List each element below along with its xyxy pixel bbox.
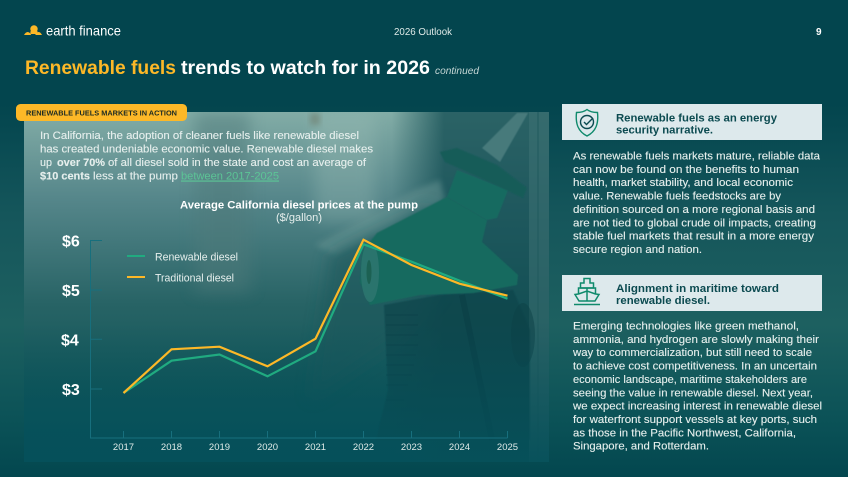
text block: energy security: health, market stability, and local economic	[573, 177, 793, 189]
text block: energy security: are not tied to global crude oil impacts, creating	[573, 217, 816, 229]
panel: energy security heading	[562, 104, 822, 140]
text block: maritime: economic landscape, maritime stakeholders are	[573, 374, 807, 386]
text block: energy security: value. Renewable fuels feedstocks are by	[573, 191, 781, 203]
y-axis labels: $4	[61, 332, 79, 350]
text block: maritime: Singapore, and Rotterdam.	[573, 441, 709, 453]
line: renewable diesel	[124, 244, 508, 393]
text block: maritime: Emerging technologies like green methanol,	[573, 320, 799, 332]
text block: California intro: up	[40, 157, 52, 169]
text block: energy security: can now be found on the benefits to human	[573, 164, 799, 176]
chart title: ($/gallon)	[276, 212, 322, 224]
panel: maritime heading	[562, 275, 822, 311]
y-axis labels: $3	[62, 382, 80, 399]
text block: maritime: we expect increasing interest in renewable diesel	[572, 401, 822, 413]
title: trends to watch for in 2026	[181, 57, 430, 79]
x-axis labels: 2023	[401, 442, 422, 453]
x-axis labels: 2021	[305, 442, 326, 453]
x-axis labels: 2018	[161, 442, 182, 453]
text block: maritime: seeing the value in renewable diesel. Next year,	[573, 387, 813, 399]
nozzle pipe	[482, 113, 528, 162]
y-axis labels: $5	[62, 283, 80, 300]
tag: renewable fuels markets in action: RENEWABLE FUELS MARKETS IN ACTION	[26, 110, 177, 118]
chart: average California diesel prices	[61, 200, 518, 453]
text block: California intro: of all diesel sold in the state and cost an average of	[108, 157, 367, 169]
text block: California intro: $10 cents	[40, 170, 90, 182]
x-axis labels: 2022	[353, 442, 374, 453]
x-axis labels: 2017	[113, 442, 134, 453]
text block: energy security	[573, 150, 821, 256]
title: Renewable fuels	[25, 57, 176, 79]
text block: maritime	[572, 320, 822, 453]
tag: renewable fuels markets in action	[16, 104, 187, 121]
text block: energy security: secure region and nation.	[573, 244, 702, 256]
x-axis labels	[113, 442, 518, 453]
legend: Traditional diesel	[155, 272, 234, 284]
text block: energy security: definition sourced on a more regional basis and	[573, 204, 815, 216]
text block: maritime: way to commercialization, but still need to scale	[572, 347, 812, 359]
nozzle body	[360, 197, 518, 305]
text block: energy security: As renewable fuels markets mature, reliable data	[573, 150, 821, 162]
nozzle handle grip lines	[386, 315, 418, 400]
header: 2026 Outlook: 2026 Outlook	[394, 27, 453, 38]
text block: maritime: to achieve cost competitiveness. In an uncertain	[573, 361, 817, 373]
text block: California intro: over 70%	[57, 157, 105, 169]
y-axis labels	[61, 234, 80, 399]
line: traditional diesel	[124, 240, 508, 393]
y-axis labels: $6	[62, 234, 80, 250]
x-axis labels: 2020	[257, 442, 278, 453]
text block: California intro: less at the pump	[93, 170, 178, 182]
nozzle handle	[384, 290, 530, 406]
page number: 9	[816, 27, 822, 38]
text block: California intro: In California, the adoption of cleaner fuels like renewable diesel	[40, 130, 359, 142]
chart axes	[90, 240, 508, 438]
panel: maritime heading: Alignment in maritime toward	[616, 283, 779, 295]
text block: California intro: between 2017-2025	[181, 170, 279, 182]
chart title: Average California diesel prices at the pump	[180, 200, 418, 212]
chart title	[180, 200, 418, 224]
legend: Renewable diesel	[155, 252, 238, 264]
text block: maritime: for waterfront support vessels at key ports, such	[573, 414, 817, 426]
nozzle stem	[447, 170, 508, 220]
text block: California intro: has created undeniable economic value. Renewable diesel makes	[40, 144, 373, 156]
legend	[127, 252, 238, 284]
panel: energy security heading: security narrative.	[616, 124, 713, 136]
x-axis labels: 2024	[449, 442, 470, 453]
logo: earth finance: earth finance	[46, 22, 121, 38]
nozzle collar	[440, 148, 527, 198]
text block: energy security: stable fuel markets that result in a more energy	[573, 231, 814, 243]
text block: maritime: as those in the Pacific Northwest, California,	[573, 427, 796, 439]
x-axis labels: 2019	[209, 442, 230, 453]
title	[25, 57, 479, 79]
panel: maritime heading: renewable diesel.	[616, 295, 710, 307]
x-axis labels: 2025	[497, 442, 518, 453]
text block: maritime: ammonia, and hydrogen are slowly making their	[573, 334, 819, 346]
icon: shield with check	[576, 110, 598, 136]
title: continued	[435, 66, 479, 77]
icon: ship	[574, 278, 600, 304]
text block: California intro	[40, 130, 373, 182]
panel: California photo background	[24, 112, 549, 462]
panel: energy security heading: Renewable fuels as an energy	[616, 112, 778, 124]
